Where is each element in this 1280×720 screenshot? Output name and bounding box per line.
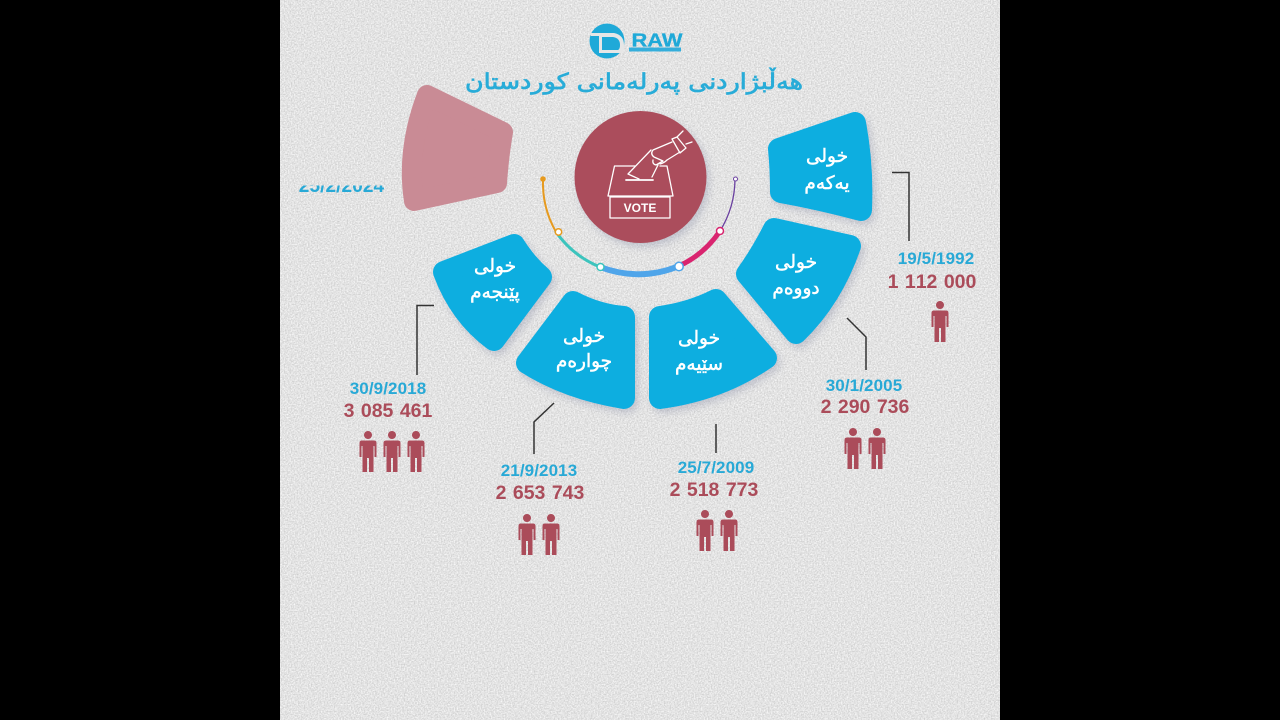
panel: first term — [779, 123, 861, 210]
stat: second term: 2 290 736 — [821, 396, 910, 418]
icons: three people — [360, 431, 424, 472]
clipped date: sixth term: 25/2/2024 — [299, 176, 385, 197]
panel: fourth term — [527, 302, 624, 398]
title: هەڵبژاردنی پەرلەمانی کوردستان — [465, 67, 803, 95]
leader line: fifth term — [417, 306, 434, 375]
stat: fifth term: 3 085 461 — [344, 400, 433, 422]
stat: second term: 30/1/2005 — [826, 376, 902, 395]
stat: fifth term — [344, 379, 433, 472]
panel: second term: خولی — [775, 252, 817, 273]
VOTE label: VOTE — [624, 201, 656, 215]
stat: first term: 19/5/1992 — [898, 249, 974, 268]
panel: third term: خولی — [678, 328, 720, 349]
icons: two people — [844, 428, 886, 469]
panel: third term — [660, 300, 766, 398]
logo: DRAW: RAW — [632, 30, 683, 50]
stat: first term: 1 112 000 — [888, 271, 977, 293]
icon: ballot box and hand — [608, 131, 692, 218]
stat: third term — [670, 458, 759, 551]
logo: DRAW — [590, 24, 683, 58]
panel: fourth term: چوارەم — [556, 351, 612, 372]
leader line: second term — [847, 318, 866, 370]
panel: faded sixth term — [412, 95, 503, 201]
panel: second term — [747, 229, 850, 333]
panel: fourth term: خولی — [563, 326, 605, 347]
panel: fifth term: خولی — [474, 256, 516, 277]
leader line: first term — [892, 172, 909, 241]
stat: second term — [821, 376, 910, 469]
leader line: fourth term — [534, 403, 554, 454]
background panel — [280, 0, 1000, 720]
icons: two people — [696, 510, 738, 551]
stat: fourth term — [496, 461, 585, 555]
panel: first term: یەکەم — [804, 173, 850, 194]
stat: fifth term: 30/9/2018 — [350, 379, 426, 398]
panel: second term: دووەم — [772, 278, 820, 299]
leader line: third term — [715, 424, 717, 453]
stat: fourth term: 2 653 743 — [496, 482, 585, 504]
icon: person — [932, 301, 948, 342]
icon: vote circle — [574, 111, 706, 243]
panel: fifth term — [444, 245, 541, 340]
stat: fourth term: 21/9/2013 — [501, 461, 577, 480]
stat: third term: 25/7/2009 — [678, 458, 754, 477]
stat: first term — [888, 249, 977, 342]
icons: two people — [518, 514, 560, 555]
panel: first term: خولی — [806, 146, 848, 167]
panel: fifth term: پێنجەم — [470, 282, 520, 303]
panel: third term: سێیەم — [675, 354, 723, 375]
stat: third term: 2 518 773 — [670, 479, 759, 501]
timeline arc — [540, 176, 738, 274]
